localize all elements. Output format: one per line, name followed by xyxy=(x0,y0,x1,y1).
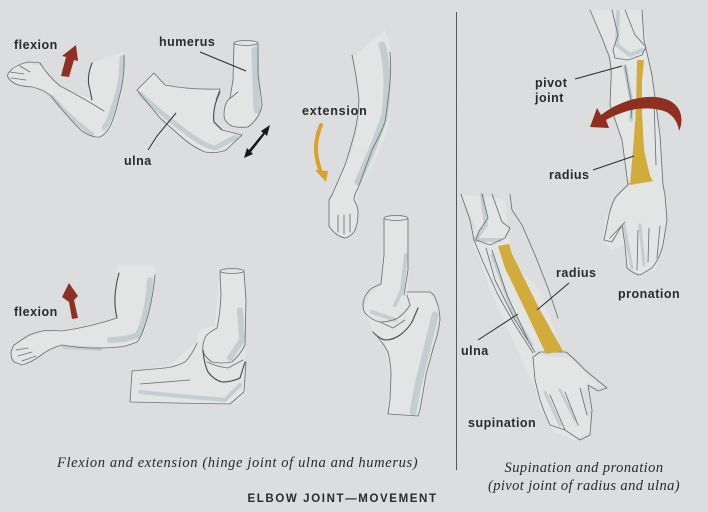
illustration: extended arm, centre xyxy=(329,30,392,238)
label: ulna, supinated xyxy=(461,314,518,358)
illustration: extended arm, lower left xyxy=(11,265,155,365)
label: radius, supinated xyxy=(537,266,597,310)
caption: supination and pronation xyxy=(488,460,680,494)
bone: radius, pronated xyxy=(630,60,653,185)
illustration: supinated forearm xyxy=(461,194,607,440)
label: supination: supination xyxy=(468,416,536,430)
illustration: elbow bones, flexed xyxy=(137,40,262,154)
illustration: flexed arm, upper xyxy=(8,52,125,137)
title: ELBOW JOINT—MOVEMENT xyxy=(248,493,436,505)
illustration: pronated forearm xyxy=(590,10,667,275)
panel: flexion and extension (hinge joint) xyxy=(8,30,440,471)
caption: supination and pronation: Supination and pronation xyxy=(504,460,664,476)
icon: red flexion arrow, lower xyxy=(62,283,78,319)
label: pronation: pronation xyxy=(618,287,680,301)
label: extension: extension xyxy=(302,104,368,118)
label: radius, pronated: radius xyxy=(549,168,590,182)
label: pivot joint xyxy=(534,66,622,105)
label: pivot joint: joint xyxy=(534,91,564,105)
panel: supination and pronation (pivot joint) xyxy=(461,10,681,494)
label: humerus xyxy=(159,35,246,71)
label: pivot joint: pivot xyxy=(535,76,568,90)
label: ulna: ulna xyxy=(124,154,152,168)
bone: radius, supinated xyxy=(498,244,563,354)
label: radius, supinated: radius xyxy=(556,266,597,280)
label: ulna, supinated: ulna xyxy=(461,344,489,358)
icon: red curved pronation arrow xyxy=(590,97,681,131)
label: flexion, lower: flexion xyxy=(14,305,58,319)
icon: red flexion arrow, upper xyxy=(61,45,78,77)
icon: orange extension arrow xyxy=(316,125,321,170)
caption: supination and pronation: (pivot joint of radius and ulna) xyxy=(488,478,680,494)
label: humerus: humerus xyxy=(159,35,215,49)
illustration: elbow bones, extended xyxy=(130,268,246,405)
label: ulna xyxy=(124,113,176,168)
label: flexion, upper: flexion xyxy=(14,38,58,52)
icon: double-headed black arrow xyxy=(244,125,270,158)
label: radius, pronated xyxy=(549,156,634,182)
illustration: elbow bones, vertical xyxy=(363,216,440,416)
caption: flexion and extension: Flexion and extension (hinge joint of ulna and humerus) xyxy=(56,455,418,471)
